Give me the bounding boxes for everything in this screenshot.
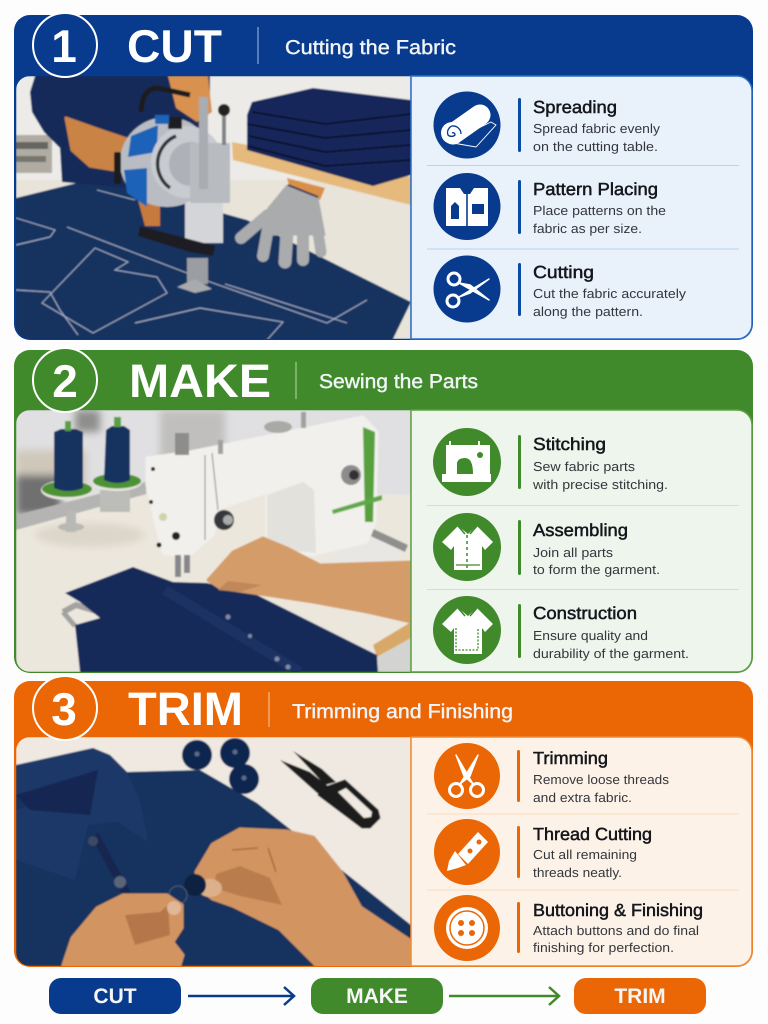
step: spreading: on the cutting table. [533, 139, 658, 154]
heading: TRIM: TRIM [128, 682, 243, 735]
step: trimming: Remove loose threads [533, 772, 670, 787]
step: buttoning and finishing: Attach buttons and do final [533, 923, 699, 938]
panel: make steps [411, 410, 752, 672]
left hand [63, 895, 183, 965]
pill: cut: CUT [93, 985, 137, 1008]
panel: cut [14, 13, 753, 340]
arrow: cut to make [188, 987, 294, 1005]
held button [184, 874, 206, 896]
step: trimming: Trimming [533, 748, 608, 768]
arrow: make to trim [449, 987, 559, 1005]
step: construction: Construction [533, 603, 637, 623]
step: trimming: and extra fabric. [533, 790, 632, 805]
step: pattern placing: Pattern Placing [533, 179, 658, 199]
subheading: sewing the parts: Sewing the Parts [319, 371, 478, 393]
step: assembling [433, 513, 660, 581]
heading: CUT: CUT [127, 20, 222, 72]
shirt [65, 567, 378, 672]
step: cutting: Cutting [533, 262, 594, 282]
step: trimming [434, 743, 670, 809]
step: buttoning and finishing: finishing for perfection. [533, 940, 674, 955]
step: spreading: Spreading [533, 97, 617, 117]
flow: cut make trim [49, 978, 706, 1014]
step: buttoning and finishing: Buttoning & Finishing [533, 900, 703, 920]
pill: cut [49, 978, 181, 1014]
step: assembling: to form the garment. [533, 562, 660, 577]
pill: make: MAKE [346, 985, 408, 1008]
step number 3: 3 [51, 683, 77, 735]
step: spreading [434, 92, 661, 158]
step: buttoning and finishing [434, 895, 703, 961]
pill: trim: TRIM [614, 985, 666, 1008]
step: stitching [433, 428, 668, 496]
step: thread cutting: Thread Cutting [533, 824, 652, 844]
step: stitching: Sew fabric parts [533, 459, 636, 474]
step: assembling: Assembling [533, 520, 628, 540]
machine [300, 535, 400, 575]
right hand [197, 830, 411, 965]
cutter body [120, 118, 198, 208]
photo: fabric cutting machine [16, 76, 411, 340]
step: pattern placing: fabric as per size. [533, 221, 642, 236]
panel: trim steps [411, 737, 752, 966]
step: pattern placing [434, 173, 666, 240]
heading: MAKE: MAKE [129, 354, 271, 407]
step number 3 [33, 676, 97, 740]
table edge [373, 622, 411, 657]
step: pattern placing: Place patterns on the [533, 203, 666, 218]
thread snips [280, 760, 328, 795]
pill: make [311, 978, 443, 1014]
step: construction [433, 596, 689, 664]
photo: sewing machine [16, 410, 411, 672]
step: cutting: Cut the fabric accurately [533, 286, 687, 301]
step: stitching: Stitching [533, 434, 606, 454]
subheading: trimming and finishing: Trimming and Finishing [292, 701, 513, 723]
step: cutting: along the pattern. [533, 304, 643, 319]
step number 1 [33, 13, 97, 77]
panel: make [14, 348, 753, 673]
panel: cut steps [411, 76, 752, 339]
step: spreading: Spread fabric evenly [533, 121, 661, 136]
step: thread cutting: threads neatly. [533, 865, 622, 880]
hand [208, 538, 411, 622]
step: cutting [434, 256, 687, 322]
step: stitching: with precise stitching. [532, 477, 668, 492]
step number 2: 2 [52, 355, 78, 407]
step number 2 [33, 348, 97, 412]
buttons [182, 740, 212, 770]
step: thread cutting: Cut all remaining [533, 847, 637, 862]
metal frame [63, 605, 96, 612]
step: construction: Ensure quality and [533, 628, 648, 643]
panel: trim [14, 676, 753, 967]
glove [241, 185, 325, 262]
step: construction: durability of the garment. [533, 646, 689, 661]
photo: button finishing [16, 737, 411, 966]
step: thread cutting [434, 819, 652, 885]
step number 1: 1 [51, 20, 77, 72]
step: assembling: Join all parts [533, 545, 614, 560]
subheading: cutting the fabric: Cutting the Fabric [285, 37, 456, 59]
pill: trim [574, 978, 706, 1014]
